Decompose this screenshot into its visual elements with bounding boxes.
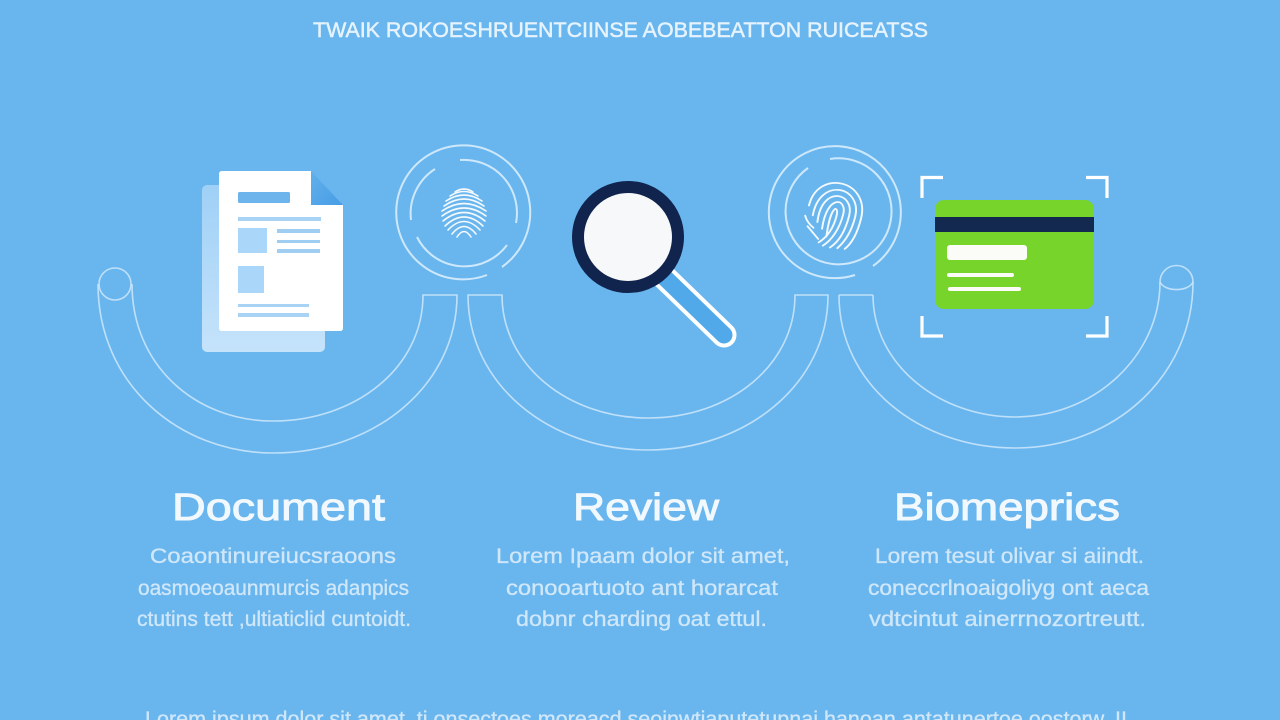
description: biometrics: vdtcintut ainerrnozortreutt. [869,608,1146,631]
description: review: dobnr charding oat ettul. [516,608,767,631]
heading: biometrics: Biomeprics [894,487,1120,529]
description: biometrics: Lorem tesut olivar si aiindt. [875,545,1144,568]
description: review: Lorem Ipaam dolor sit amet, [496,545,790,568]
scan brackets [922,178,1107,336]
card body [935,200,1094,309]
description: review [496,545,790,631]
icon: fingerprint ring right [769,146,901,278]
fingerprint right [799,177,868,253]
connector arc: left [98,268,457,453]
description: document [137,545,411,631]
heading: review: Review [573,487,720,529]
title: TWAIK ROKOESHRUENTCIINSE AOBEBEATTON RUICEATSS [313,19,928,42]
description: document: oasmoeoaunmurcis adanpics [138,577,409,600]
icon: document [202,171,343,352]
connector arc: middle [468,295,828,450]
column: biometrics text [868,487,1149,631]
icon: id card with scan brackets [922,178,1107,336]
description: document: ctutins tett ,ultiaticlid cuntoidt. [137,608,411,631]
column: document text [137,487,411,631]
icon: fingerprint ring left [396,145,530,279]
column: review text [496,487,790,631]
description: review: conooartuoto ant horarcat [506,577,778,600]
description: biometrics: coneccrlnoaigoliyg ont aeca [868,577,1149,600]
card details [947,245,1027,291]
heading: document: Document [172,487,386,529]
connector arc: right [839,266,1193,448]
magnetic stripe [935,217,1094,232]
icon: magnifier [578,187,724,335]
description: biometrics [868,545,1149,631]
description: document: Coaontinureiucsraoons [150,545,396,568]
fingerprint left [442,189,486,237]
